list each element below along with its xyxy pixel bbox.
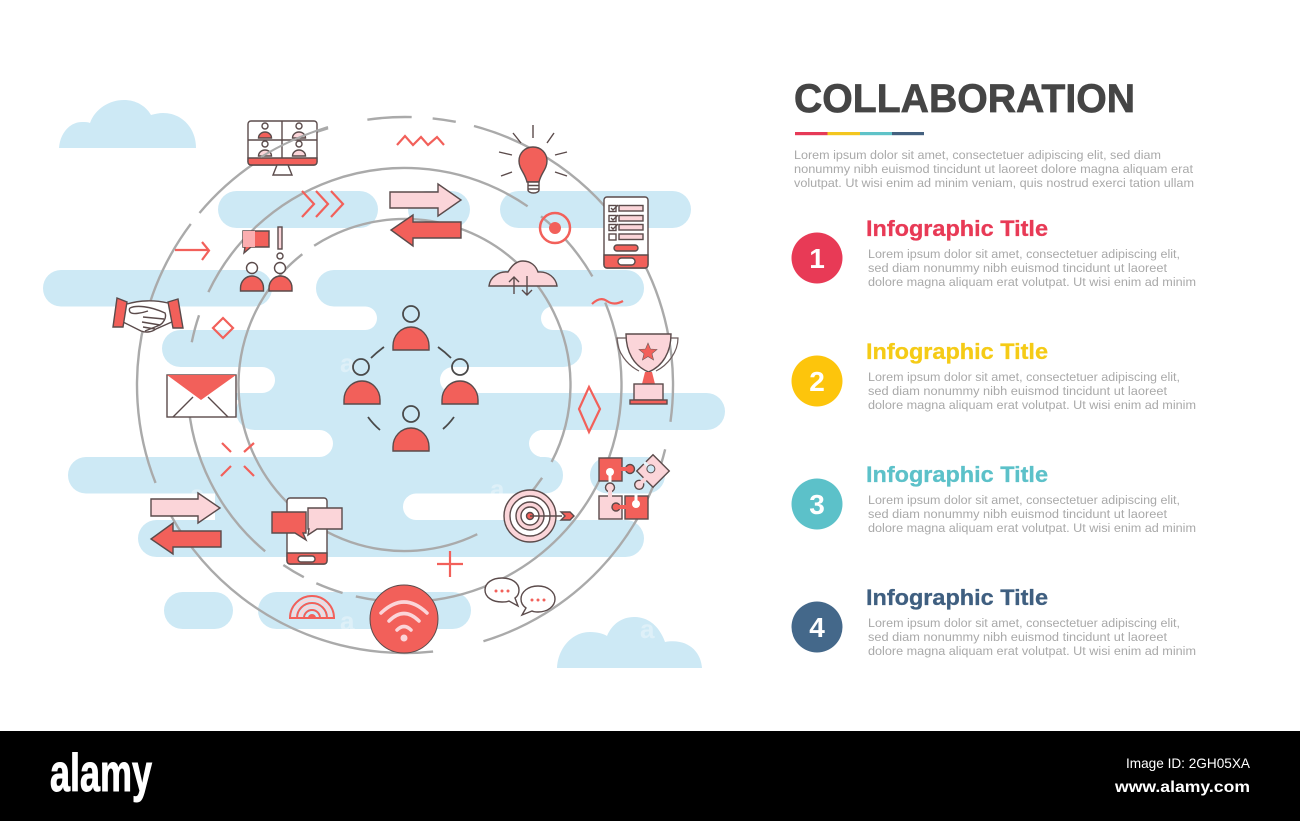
item text 3: dolore magna aliquam erat volutpat. Ut wisi enim ad minim xyxy=(868,521,1196,535)
item title 3: Infographic Title xyxy=(866,462,1048,487)
item text 4: Lorem ipsum dolor sit amet, consectetuer adipiscing elit, xyxy=(868,616,1180,630)
faint watermark letters: a xyxy=(340,348,355,378)
icon: speech bubbles xyxy=(485,578,555,615)
item text 2: sed diam nonummy nibh euismod tincidunt ut laoreet xyxy=(868,384,1168,398)
number badge 2 xyxy=(792,356,842,406)
footer bar xyxy=(0,731,1300,821)
icon: handshake xyxy=(113,298,183,332)
intro paragraph: volutpat. Ut wisi enim ad minim veniam, quis nostrud exerci tation ullam xyxy=(794,176,1194,190)
person: right xyxy=(442,359,478,404)
item text 4: sed diam nonummy nibh euismod tincidunt ut laoreet xyxy=(868,630,1168,644)
item title 2: Infographic Title xyxy=(866,339,1048,364)
person: bottom xyxy=(393,406,429,451)
icon: small arrow xyxy=(175,242,209,260)
icon: wifi circle xyxy=(370,585,438,653)
faint watermark letters: a xyxy=(340,606,355,636)
faint watermark letters xyxy=(190,348,655,644)
icon: chevrons xyxy=(302,191,343,217)
icon: zigzag xyxy=(397,136,444,145)
item text 1: sed diam nonummy nibh euismod tincidunt ut laoreet xyxy=(868,261,1168,275)
icon: small diamond xyxy=(213,318,233,338)
icon: phone with chat bubbles xyxy=(272,498,342,564)
list item 1 xyxy=(792,216,1196,289)
icon: puzzle pieces xyxy=(599,454,669,519)
list item 2 xyxy=(792,339,1196,412)
faint watermark letters: a xyxy=(640,614,655,644)
title: COLLABORATION xyxy=(794,77,1135,121)
icon: discussion people with speech bubble and exclamation xyxy=(240,227,292,291)
item text 1: dolore magna aliquam erat volutpat. Ut wisi enim ad minim xyxy=(868,275,1196,289)
icon: rainbow signal xyxy=(289,596,335,618)
item text 3 xyxy=(868,493,1196,535)
item text 4 xyxy=(868,616,1196,658)
icon: video call monitor xyxy=(248,121,328,175)
list item 4 xyxy=(792,585,1196,658)
number badge 2: 2 xyxy=(809,366,825,397)
icon: exchange arrows left xyxy=(151,493,221,554)
icon: big diamond xyxy=(579,387,600,432)
puzzle piece: bottom left pink xyxy=(599,483,622,519)
connecting arcs xyxy=(368,347,454,430)
icon: envelope xyxy=(167,375,236,417)
item text 2 xyxy=(868,370,1196,412)
dashed concentric rings xyxy=(80,60,730,710)
faint watermark letters: a xyxy=(490,474,505,504)
item title 4: Infographic Title xyxy=(866,585,1048,610)
colour divider xyxy=(795,132,924,135)
item text 4: dolore magna aliquam erat volutpat. Ut wisi enim ad minim xyxy=(868,644,1196,658)
icon: target dot xyxy=(540,213,570,243)
icon: form on phone xyxy=(604,197,648,268)
puzzle piece: bottom right red xyxy=(612,495,648,519)
intro paragraph: nonummy nibh euismod tincidunt ut laoreet dolore magna aliquam erat xyxy=(794,162,1194,176)
number badge 3: 3 xyxy=(809,489,825,520)
number badge 1 xyxy=(792,232,842,284)
item text 2: dolore magna aliquam erat volutpat. Ut wisi enim ad minim xyxy=(868,398,1196,412)
number badge 1: 1 xyxy=(809,243,825,274)
background clouds and pills xyxy=(43,100,725,668)
icon: exchange arrows top xyxy=(390,184,461,246)
intro paragraph xyxy=(794,148,1194,190)
item text 2: Lorem ipsum dolor sit amet, consectetuer adipiscing elit, xyxy=(868,370,1180,384)
list item 3 xyxy=(792,462,1196,535)
item title 1: Infographic Title xyxy=(866,216,1048,241)
icon: light bulb xyxy=(499,125,567,193)
faint watermark letters: a xyxy=(190,479,205,509)
number badge 4 xyxy=(792,602,842,652)
icon: tilde xyxy=(592,299,623,304)
icon: sparks xyxy=(221,443,254,476)
number badge 4: 4 xyxy=(809,612,825,643)
website: www.alamy.com xyxy=(1114,779,1250,796)
person: left xyxy=(344,359,380,404)
number badge 3 xyxy=(792,478,842,530)
icon: plus xyxy=(437,551,463,577)
icon: cloud transfer xyxy=(489,261,557,295)
item text 1 xyxy=(868,247,1196,289)
puzzle piece: rotated pink xyxy=(627,454,669,496)
icon: dartboard with arrow xyxy=(504,490,574,542)
central team of four people xyxy=(344,306,478,451)
item text 1: Lorem ipsum dolor sit amet, consectetuer adipiscing elit, xyxy=(868,247,1180,261)
icon: trophy xyxy=(617,334,678,404)
person: top xyxy=(393,306,429,350)
item text 3: sed diam nonummy nibh euismod tincidunt ut laoreet xyxy=(868,507,1168,521)
item text 3: Lorem ipsum dolor sit amet, consectetuer adipiscing elit, xyxy=(868,493,1180,507)
image id: Image ID: 2GH05XA xyxy=(1126,755,1251,771)
puzzle piece: top left red xyxy=(599,458,634,482)
intro paragraph: Lorem ipsum dolor sit amet, consectetuer adipiscing elit, sed diam xyxy=(794,148,1161,162)
footer logo: alamy xyxy=(50,744,152,803)
